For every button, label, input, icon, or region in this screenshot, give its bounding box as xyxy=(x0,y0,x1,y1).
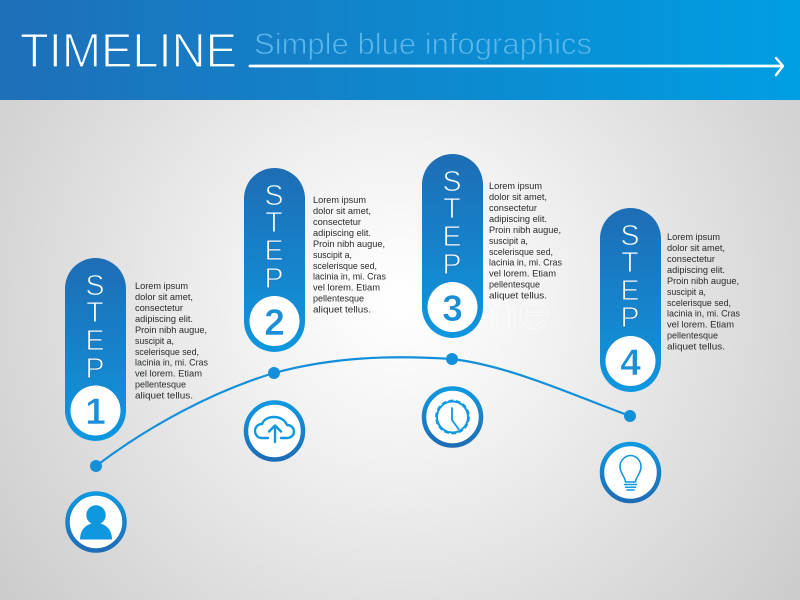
step 2 text: vel lorem. Etiam xyxy=(313,282,380,292)
step 2 text: consectetur xyxy=(313,216,361,227)
step 3 number: 3 xyxy=(442,288,463,329)
step 2 text: Proin nibh augue, xyxy=(313,238,385,249)
step 3 text: scelerisque sed, xyxy=(489,246,553,257)
timeline curve xyxy=(96,357,630,466)
icon: person xyxy=(68,494,124,550)
step 1 label: P xyxy=(85,353,105,385)
icon: clock xyxy=(424,388,481,446)
step 2 text: aliquet tellus. xyxy=(313,304,371,314)
step 3 text: consectetur xyxy=(489,202,537,213)
step 4 text: adipiscing elit. xyxy=(667,264,725,275)
step 3 text xyxy=(489,180,562,300)
step 1 text: dolor sit amet, xyxy=(135,291,193,302)
step 3 text: Proin nibh augue, xyxy=(489,224,561,235)
step 1 text: Proin nibh augue, xyxy=(135,324,207,335)
step 4 text: aliquet tellus. xyxy=(667,340,725,352)
panel: step 4 xyxy=(600,208,740,501)
step 1 text: vel lorem. Etiam xyxy=(135,368,202,378)
icon: light bulb xyxy=(602,444,659,501)
step 2 text xyxy=(313,194,386,314)
step 1 text: lacinia in, mi. Cras xyxy=(135,356,208,368)
step 4 label xyxy=(620,220,640,334)
step 2 text: dolor sit amet, xyxy=(313,205,371,216)
step 3 pill xyxy=(422,154,483,338)
step 3 number xyxy=(428,282,478,332)
step 4 text: Lorem ipsum xyxy=(667,231,720,242)
header banner xyxy=(0,0,800,100)
step 2 number: 2 xyxy=(264,302,285,343)
arrow xyxy=(250,58,783,75)
step 3 dot xyxy=(446,353,458,365)
step 2 text: scelerisque sed, xyxy=(313,260,377,271)
subtitle: Simple blue infographics xyxy=(254,28,592,61)
step 1 text: suscipit a, xyxy=(135,335,174,346)
step 1 label xyxy=(85,270,105,385)
panel: step 1 xyxy=(65,258,208,550)
step 1 number xyxy=(70,386,120,436)
step 4 text: lacinia in, mi. Cras xyxy=(667,308,740,318)
step 4 label: P xyxy=(620,302,640,334)
step 3 label: E xyxy=(442,221,462,253)
step 3 text: lacinia in, mi. Cras xyxy=(489,256,562,268)
step 4 dot xyxy=(624,410,636,422)
step 1 label: T xyxy=(86,297,104,329)
step 3 text: vel lorem. Etiam xyxy=(489,268,556,278)
panel: step 2 xyxy=(244,168,386,460)
step 2 text: Lorem ipsum xyxy=(313,194,366,205)
watermark: dreamstime xyxy=(250,283,550,339)
step 1 text: adipiscing elit. xyxy=(135,313,193,324)
step 4 number xyxy=(606,336,656,386)
step 4 text: vel lorem. Etiam xyxy=(667,318,734,330)
step 3 label: S xyxy=(442,166,462,198)
step 1 label: E xyxy=(85,325,105,357)
step 3 text: dolor sit amet, xyxy=(489,191,547,202)
step 3 text: suscipit a, xyxy=(489,235,528,246)
step 4 label: T xyxy=(621,247,639,279)
step 2 dot xyxy=(268,367,280,379)
step 1 dot xyxy=(90,460,102,472)
step 4 text: pellentesque xyxy=(667,330,718,340)
step 3 text: aliquet tellus. xyxy=(489,290,547,300)
step 4 label: E xyxy=(620,275,640,307)
step 2 label: S xyxy=(264,180,284,212)
step 4 text: Proin nibh augue, xyxy=(667,275,739,286)
step 2 text: lacinia in, mi. Cras xyxy=(313,270,386,282)
step 1 text: aliquet tellus. xyxy=(135,390,193,400)
step 4 pill xyxy=(600,208,661,392)
step 4 label: S xyxy=(620,220,640,252)
step 2 label: E xyxy=(264,235,284,267)
step 4 text: dolor sit amet, xyxy=(667,242,725,253)
icon: cloud upload xyxy=(246,402,303,460)
step 4 text xyxy=(667,231,740,352)
step 3 text: pellentesque xyxy=(489,278,540,290)
step 2 text: suscipit a, xyxy=(313,249,352,260)
step 1 text: Lorem ipsum xyxy=(135,280,188,291)
step 2 text: adipiscing elit. xyxy=(313,227,371,238)
step 3 label: T xyxy=(443,193,461,225)
step 4 number: 4 xyxy=(620,342,641,383)
step 1 number: 1 xyxy=(85,391,106,432)
step 2 number xyxy=(250,296,300,346)
step 2 label: T xyxy=(265,207,283,239)
step 1 label: S xyxy=(85,270,105,302)
step 2 label xyxy=(264,180,284,295)
step 3 text: Lorem ipsum xyxy=(489,180,542,191)
step 3 text: adipiscing elit. xyxy=(489,213,547,224)
title: TIMELINE xyxy=(20,25,237,78)
step 2 pill xyxy=(244,168,305,352)
step 4 text: consectetur xyxy=(667,253,715,264)
step 4 text: scelerisque sed, xyxy=(667,297,731,308)
panel: step 3 xyxy=(422,154,562,446)
step 4 text: suscipit a, xyxy=(667,286,706,297)
step 2 label: P xyxy=(264,263,284,295)
step 3 label xyxy=(442,166,462,281)
step 1 text xyxy=(135,280,208,400)
step 3 label: P xyxy=(442,249,462,281)
step 1 pill xyxy=(65,258,126,441)
step 2 text: pellentesque xyxy=(313,292,364,304)
step 1 text: consectetur xyxy=(135,302,183,313)
step 1 text: pellentesque xyxy=(135,378,186,390)
step 1 text: scelerisque sed, xyxy=(135,346,199,357)
